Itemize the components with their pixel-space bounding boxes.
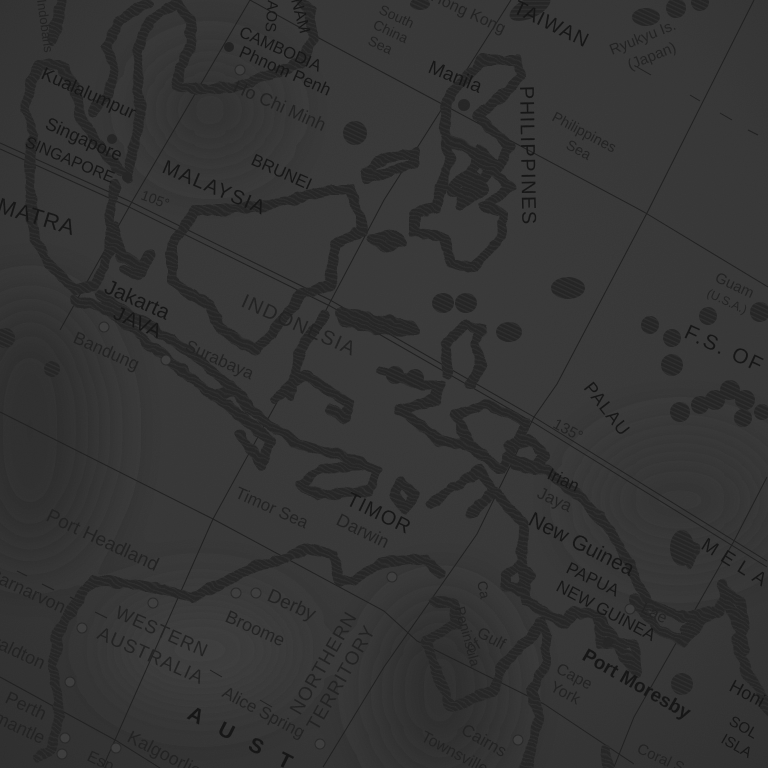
place labels: Pacific: 135° — [550, 416, 586, 445]
place labels: New Guinea: Lae — [638, 600, 670, 627]
place labels: Australia: Derby — [264, 585, 319, 625]
place labels: New Guinea: Jaya — [534, 483, 575, 516]
place labels: Pacific: PALAU — [580, 378, 634, 440]
place labels: New Guinea: NEW GUINEA — [553, 577, 659, 645]
place labels: Australia: Alice Spring — [219, 683, 308, 742]
place labels: Australia: NORTHERN — [286, 608, 362, 718]
place labels: South China Sea and Philippines: Manila — [425, 57, 485, 98]
place labels: New Guinea: ISLA — [718, 731, 755, 762]
place labels: Pacific — [550, 269, 768, 595]
coastline: northern Australia — [37, 549, 608, 768]
place labels: New Guinea: Gulf — [474, 625, 509, 654]
place labels: Pacific: Guam — [712, 269, 757, 302]
place labels: Indonesia: Darwin — [333, 510, 392, 552]
place labels: mainland and Malaysia: BRUNEI — [248, 150, 315, 194]
place labels: New Guinea: Ca — [474, 579, 493, 600]
coastline: Sumatra — [30, 150, 150, 290]
coastline: Java and the Lesser Sunda islands — [75, 295, 378, 495]
place labels: Australia: Broome — [222, 606, 288, 650]
place labels: South China Sea and Philippines — [366, 0, 679, 226]
place labels: Indonesia: Jakarta — [101, 276, 174, 325]
coastline: New Guinea — [395, 404, 768, 710]
place labels: New Guinea: PAPUA — [563, 559, 623, 601]
place labels: Indonesia: JAVA — [110, 302, 166, 343]
place labels: South China Sea and Philippines: South — [377, 1, 417, 31]
place labels: New Guinea: Honi — [726, 676, 768, 711]
place labels: mainland and Malaysia: Singapore — [42, 113, 125, 165]
place labels: New Guinea: York — [547, 679, 584, 709]
city markers — [57, 42, 635, 759]
place labels: mainland and Malaysia: CAMBODIA — [236, 23, 324, 75]
place labels: South China Sea and Philippines: Ryukyu Is. — [607, 17, 678, 59]
place labels: Indonesia: INDONESIA — [238, 290, 360, 361]
place labels: New Guinea: Cairns — [458, 720, 510, 761]
place labels: mainland and Malaysia: SINGAPORE — [22, 134, 117, 187]
coastline: Malay peninsula and Indochina — [25, 0, 313, 178]
place labels: Indonesia: Surabaya — [182, 336, 257, 383]
place labels: New Guinea: Cape — [553, 661, 595, 694]
place labels: Indonesia: Bandung — [70, 327, 143, 374]
place labels: South China Sea and Philippines: Philippines — [549, 109, 619, 156]
place labels: Australia: Port Headland — [43, 505, 162, 576]
place labels: South China Sea and Philippines: China — [371, 16, 411, 46]
place labels: Indonesia — [70, 276, 415, 552]
place labels: Australia — [0, 505, 380, 768]
place labels: mainland and Malaysia — [0, 0, 334, 240]
place labels: mainland and Malaysia: 105° — [139, 187, 172, 212]
place labels: Pacific: (U.S.A.) — [705, 286, 749, 317]
place labels: mainland and Malaysia: Kualalumpur — [38, 63, 139, 123]
place labels: mainland and Malaysia: Phnom Penh — [236, 42, 334, 100]
place labels: New Guinea: New Guinea — [525, 508, 638, 581]
place labels: South China Sea and Philippines: (Japan) — [625, 39, 679, 74]
place labels: South China Sea and Philippines: Sea — [563, 137, 594, 164]
place labels: mainland and Malaysia: Ho Chi Minh — [230, 76, 329, 135]
place labels: mainland and Malaysia: AOS — [261, 0, 281, 33]
place labels: New Guinea: Irian — [544, 464, 582, 496]
place labels: Australia: TERRITORY — [303, 622, 380, 734]
place labels: mainland and Malaysia: MALAYSIA — [159, 156, 269, 220]
place labels: New Guinea: of — [464, 636, 484, 657]
place labels: South China Sea and Philippines: PHILIPPINES — [515, 86, 539, 226]
coastline: Borneo — [172, 190, 362, 350]
place labels: Australia: AUSTRALIA — [94, 623, 207, 689]
place labels: Pacific: F.S. OF — [681, 321, 768, 378]
place labels: South China Sea and Philippines: Sea — [366, 32, 395, 57]
place labels: New Guinea: Peninsula — [452, 605, 484, 668]
place labels: Indonesia: Timor Sea — [232, 483, 312, 533]
place labels: New Guinea — [418, 464, 768, 768]
coastline: Sulawesi and nearby islands — [290, 152, 482, 445]
coastline: Philippines — [414, 60, 521, 267]
place labels: Indonesia: TIMOR — [343, 489, 415, 539]
place labels: Australia: Perth — [2, 687, 50, 724]
place labels: New Guinea: SOL — [726, 713, 760, 742]
place labels: New Guinea: Port Moresby — [578, 645, 695, 724]
place labels: Australia: WESTERN — [112, 601, 212, 661]
